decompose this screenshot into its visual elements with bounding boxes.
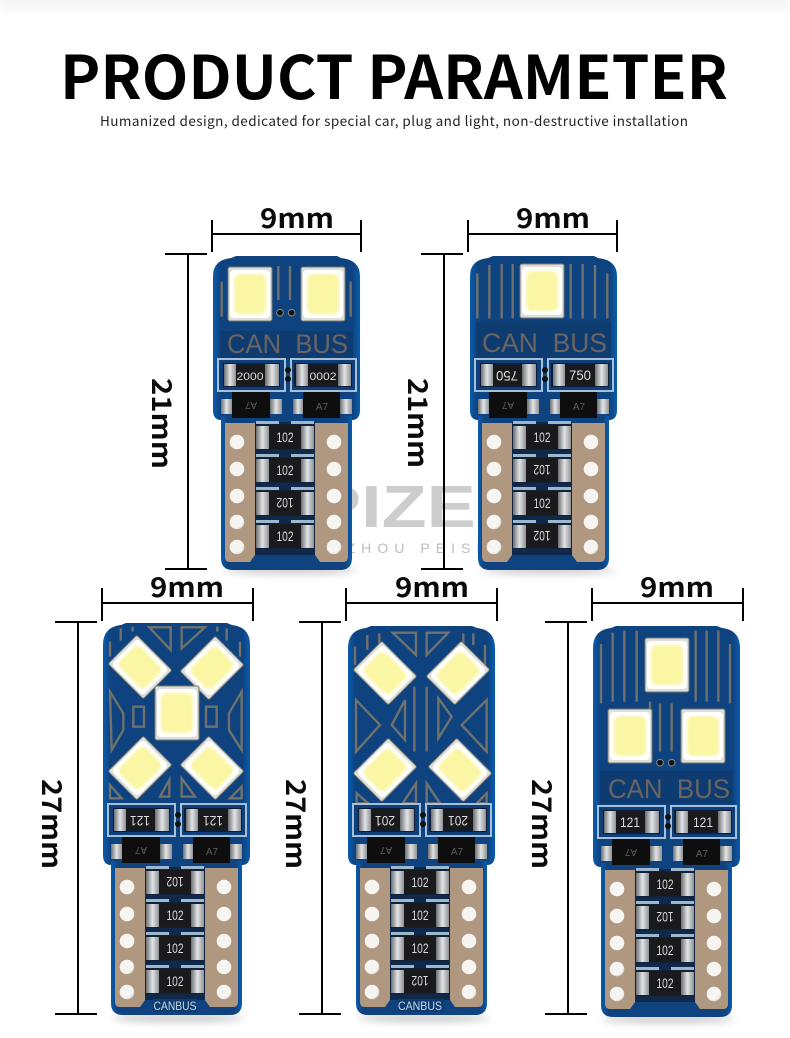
dimension: bulb 3 width <box>102 566 253 621</box>
control 3: A7 <box>206 847 219 858</box>
control 3: A7 <box>134 844 147 855</box>
LEDs 1 <box>228 267 345 321</box>
tail 3: 102 <box>166 907 184 923</box>
watermark: GUANGZHOU PEISHENG <box>265 540 535 556</box>
tail 3: 102 <box>166 874 184 890</box>
tail 1: 102 <box>276 495 294 511</box>
dimension: bulb 2 width <box>468 197 617 252</box>
control 2: 750 <box>569 367 591 383</box>
bulb shadows <box>112 566 734 1023</box>
tail 1: 102 <box>276 429 294 445</box>
control 1: A7 <box>244 399 257 410</box>
dimension: bulb 4 width <box>346 566 497 621</box>
tail 2: 102 <box>533 528 550 544</box>
tail 1: 102 <box>276 462 294 478</box>
control 4: 201 <box>448 813 468 829</box>
CAN BUS 2: CAN BUS <box>482 328 607 358</box>
control 5: A7 <box>624 846 637 857</box>
control 2 <box>475 359 613 418</box>
tail 2: 102 <box>534 429 551 445</box>
dimension: bulb 1 width: 9mm <box>260 197 334 236</box>
dimension: bulb 5 height: 27mm <box>524 779 563 869</box>
LEDs 3 <box>108 635 244 800</box>
tail 5: 102 <box>656 942 674 958</box>
tail 2: 102 <box>533 462 550 478</box>
board body <box>348 626 495 865</box>
traces 3 <box>110 627 242 798</box>
dimension: bulb 1 height: 21mm <box>144 378 183 469</box>
control 4: A7 <box>379 844 392 855</box>
tail 4: 102 <box>412 874 429 890</box>
control 1 <box>218 359 356 418</box>
tail 5: 102 <box>656 975 674 991</box>
tail 4: 102 <box>411 973 428 989</box>
CANBUS tag 3: CANBUS <box>154 999 196 1013</box>
traces 1 <box>222 266 351 317</box>
watermark: PIZEU <box>312 474 529 540</box>
LED 2 <box>520 264 564 318</box>
control 2: 750 <box>496 368 518 384</box>
traces 5 <box>601 631 730 766</box>
bulb 4: four LEDs, 27mm <box>348 626 495 1015</box>
dimension: bulb 2 height <box>400 254 463 569</box>
control 5: A7 <box>696 849 709 860</box>
LEDs 4 <box>353 641 492 802</box>
board body <box>213 256 360 420</box>
dimension: bulb 5 width <box>592 566 743 621</box>
watermark <box>265 474 535 556</box>
CAN BUS 5: CAN BUS <box>608 774 730 804</box>
dimension: bulb 2 width: 9mm <box>516 197 590 236</box>
dimension: bulb 5 width: 9mm <box>640 566 714 605</box>
CANBUS tag 4: CANBUS <box>398 999 442 1013</box>
title: PRODUCT PARAMETER <box>60 30 728 117</box>
board body <box>470 256 617 420</box>
traces 2 <box>477 264 607 318</box>
dimension: bulb 4 height <box>278 622 341 1014</box>
control 3 <box>108 804 246 863</box>
tail 2: 102 <box>534 495 551 511</box>
dimension: bulb 4 width: 9mm <box>395 566 469 605</box>
control 1: 0002 <box>310 371 336 383</box>
board body <box>593 626 740 867</box>
control 5: 121 <box>620 814 640 830</box>
control 3: 121 <box>130 813 150 829</box>
control 1: 2000 <box>236 371 264 383</box>
tail 2 <box>478 416 609 570</box>
dimension: bulb 5 height <box>524 622 587 1014</box>
tail 1 <box>221 416 352 570</box>
tail 4: 102 <box>412 940 429 956</box>
dimension: bulb 1 height <box>144 254 207 569</box>
dimension: bulb 3 height: 27mm <box>34 779 73 869</box>
control 4 <box>353 804 491 863</box>
tail 3: 102 <box>166 940 184 956</box>
bulb 3: five LEDs, 27mm <box>103 623 250 1015</box>
LEDs 5 <box>608 638 725 763</box>
tail 4 <box>356 861 487 1015</box>
control 4: A7 <box>451 847 464 858</box>
tail 5: 102 <box>656 876 674 892</box>
dimension: bulb 1 width <box>212 197 361 252</box>
tail 5 <box>601 863 732 1017</box>
control 3: 121 <box>203 813 223 829</box>
tail 4: 102 <box>412 907 429 923</box>
control 1: A7 <box>316 402 329 413</box>
tail 5: 102 <box>656 909 674 925</box>
board body <box>103 623 250 865</box>
control 5 <box>598 806 736 865</box>
tail 1: 102 <box>276 528 294 544</box>
CAN BUS 1: CAN BUS <box>227 329 348 359</box>
tail 3 <box>111 861 242 1015</box>
dimension: bulb 2 height: 21mm <box>400 378 439 468</box>
top faint shadow band <box>0 0 790 10</box>
control 2: A7 <box>573 402 586 413</box>
bulb 1: two LEDs, 21mm <box>213 256 360 570</box>
control 4: 201 <box>375 813 395 829</box>
bulb 2: one LED, 21mm <box>470 256 617 570</box>
dimension: bulb 3 height <box>34 622 97 1014</box>
dimension: bulb 4 height: 27mm <box>278 779 317 869</box>
control 5: 121 <box>693 814 713 830</box>
bulb 5: three LEDs, 27mm <box>593 626 740 1017</box>
tail 3: 102 <box>166 973 184 989</box>
control 2: A7 <box>501 399 514 410</box>
dimension: bulb 3 width: 9mm <box>150 566 224 605</box>
subtitle: Humanized design, dedicated for special car, plug and light, non-destructive installation <box>100 110 688 130</box>
traces 4 <box>355 633 487 803</box>
